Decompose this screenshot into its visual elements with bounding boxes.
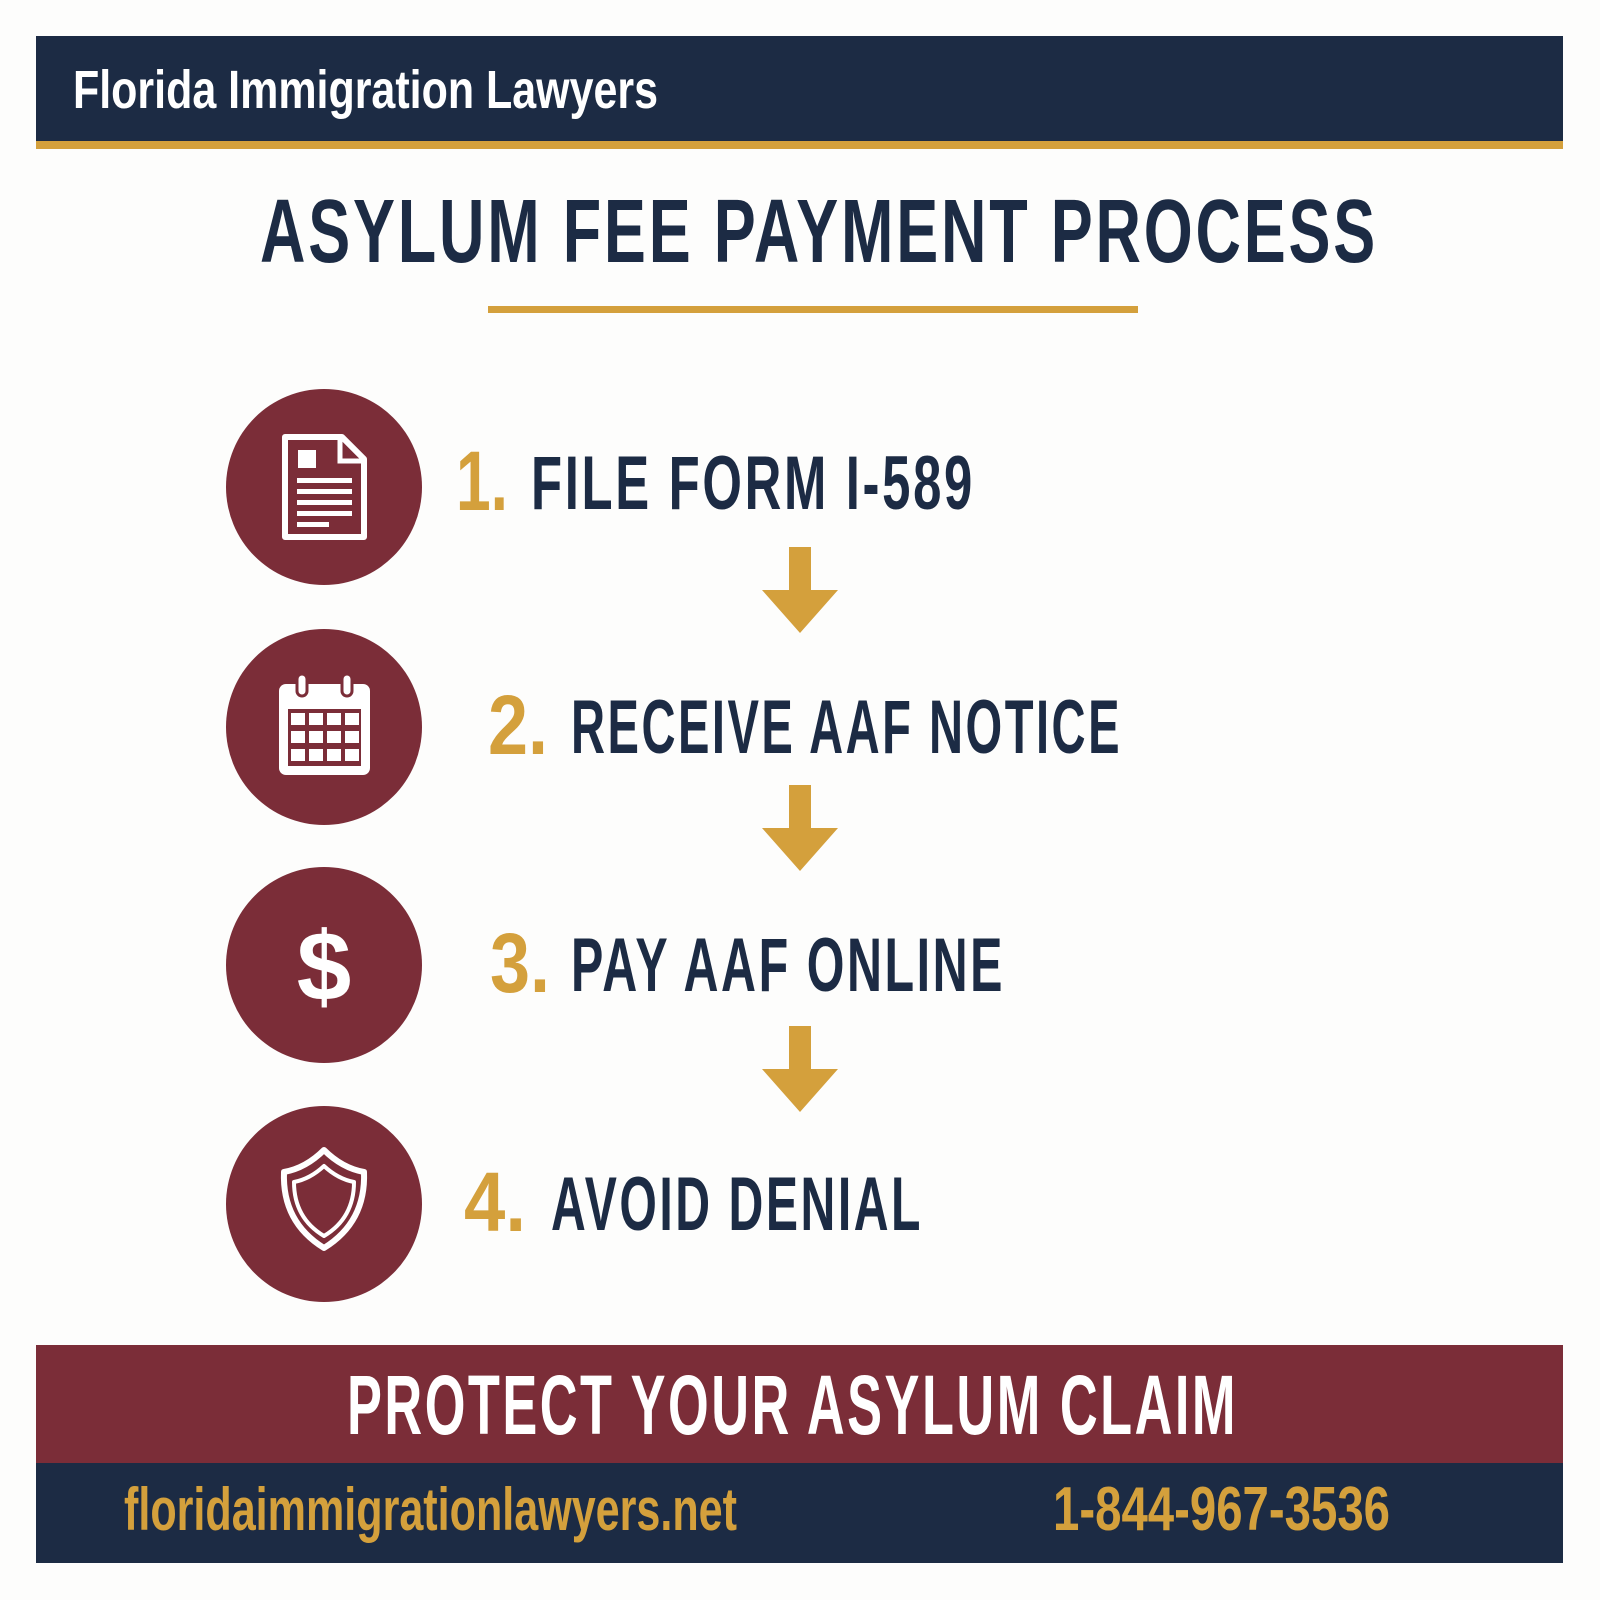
step 2 label (488, 678, 1122, 772)
contact bar (36, 1463, 1563, 1563)
icon: dollar (226, 867, 422, 1063)
step 1 label: 1. (456, 434, 508, 528)
step 4 label (464, 1155, 923, 1249)
step 1 (226, 389, 975, 585)
icon: dollar: $ (297, 911, 351, 1021)
step 2 label: 2. (488, 678, 548, 772)
icon: shield (226, 1106, 422, 1302)
step 3 (226, 867, 1005, 1063)
icon: calendar (226, 629, 422, 825)
arrow 1 (762, 547, 838, 633)
website: floridaimmigrationlawyers.net (124, 1476, 737, 1543)
icon: document (226, 389, 422, 585)
phone: 1-844-967-3536 (1053, 1475, 1390, 1544)
header bar (36, 36, 1563, 149)
step 3 label: PAY AAF ONLINE (571, 923, 1005, 1008)
title underline (488, 306, 1138, 313)
step 3 label (490, 916, 1005, 1010)
header text: Florida Immigration Lawyers (73, 60, 658, 120)
step 4 label: 4. (464, 1155, 526, 1249)
step 2 (226, 629, 1122, 825)
arrow 3 (762, 1026, 838, 1112)
step 3 label: 3. (490, 916, 550, 1010)
step 2 label: RECEIVE AAF NOTICE (571, 685, 1122, 770)
footer banner (36, 1345, 1563, 1463)
step 4 label: AVOID DENIAL (551, 1162, 923, 1247)
step 1 label (456, 434, 975, 528)
step 1 label: FILE FORM I-589 (531, 441, 975, 526)
step 4 (226, 1106, 923, 1302)
arrow 2 (762, 785, 838, 871)
